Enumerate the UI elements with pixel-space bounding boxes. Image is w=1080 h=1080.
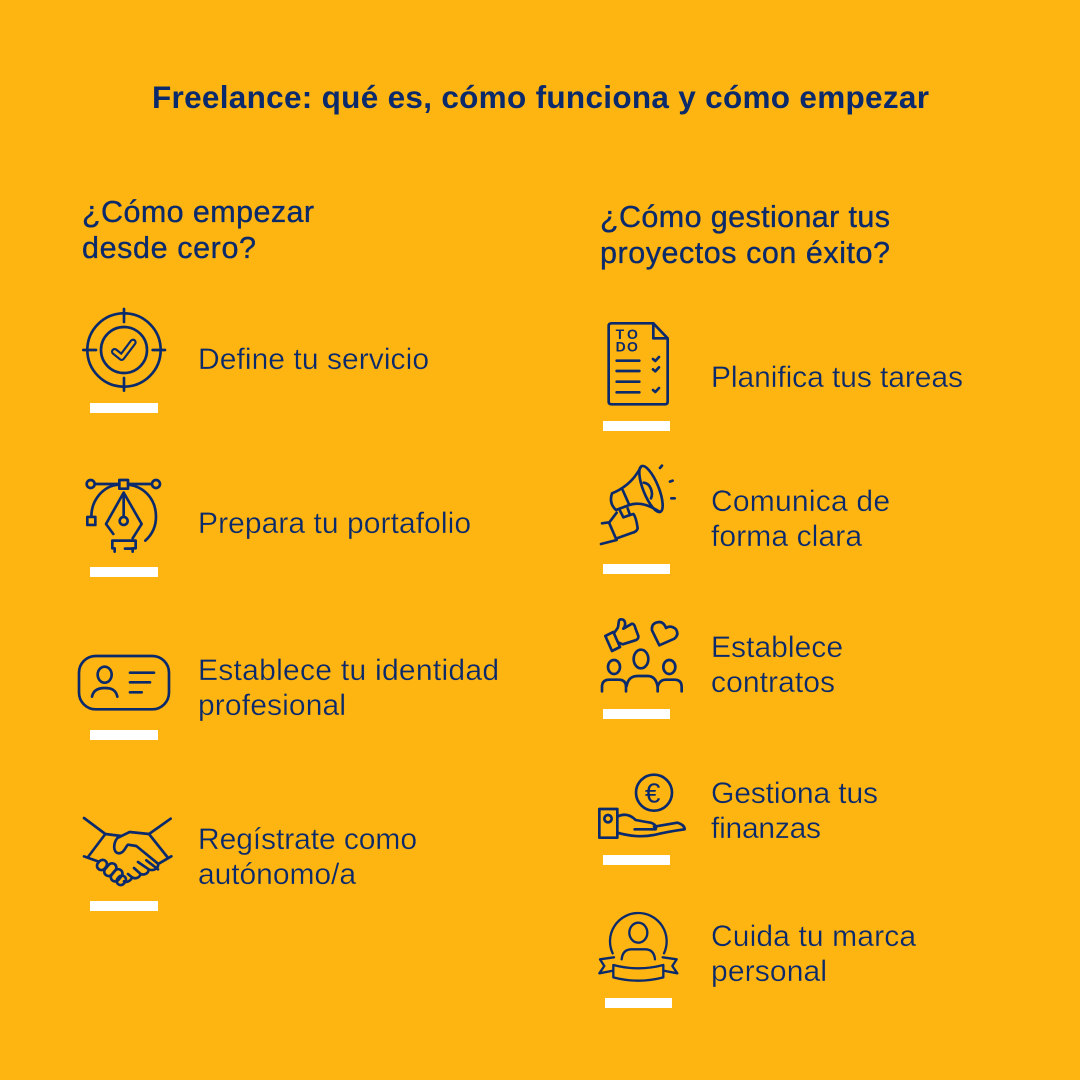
icon: target with check [83, 309, 165, 391]
bar [603, 564, 670, 574]
heading: right column [600, 200, 890, 270]
icon: id card [79, 656, 169, 709]
icon: megaphone [601, 463, 675, 544]
title: Freelance: qué es, cómo funciona y cómo empezar [152, 79, 929, 115]
panel: prepara tu portafolio [87, 480, 471, 577]
label: contratos [711, 666, 835, 699]
bar [603, 709, 670, 719]
label: personal [711, 955, 827, 988]
icon: people with like and heart [602, 619, 682, 691]
label [198, 823, 417, 891]
panel: define tu servicio [83, 309, 429, 413]
bar [90, 901, 158, 911]
label [711, 920, 916, 988]
panel: establece tu identidad profesional [79, 654, 499, 740]
heading: left column [82, 195, 314, 265]
label: forma clara [711, 520, 862, 553]
icon: hand with euro coin [599, 775, 685, 838]
label: Define tu servicio [198, 343, 429, 376]
icon: to-do list: TO [616, 326, 638, 342]
label [711, 631, 843, 699]
bar [603, 855, 670, 865]
bar [603, 421, 670, 431]
icon: hand with euro coin: € [645, 777, 661, 808]
bar [90, 730, 158, 740]
icon: person badge with ribbon [599, 913, 677, 981]
heading: right column: proyectos con éxito? [600, 236, 890, 270]
bar [605, 998, 672, 1008]
panel: establece contratos [602, 619, 843, 719]
label: Prepara tu portafolio [198, 507, 471, 540]
bar [90, 567, 158, 577]
label [711, 777, 878, 845]
label [711, 485, 890, 553]
label: Establece [711, 631, 843, 664]
label: Cuida tu marca [711, 920, 916, 953]
panel: cuida tu marca personal [599, 913, 916, 1008]
heading: left column: desde cero? [82, 231, 256, 265]
icon: to-do list [609, 323, 668, 404]
label: autónomo/a [198, 858, 356, 891]
label: finanzas [711, 812, 821, 845]
panel: gestiona tus finanzas [599, 775, 878, 865]
panel: comunica de forma clara [601, 463, 890, 574]
heading: right column: ¿Cómo gestionar tus [600, 200, 890, 234]
panel: planifica tus tareas [603, 323, 963, 431]
panel: registrate como autonomo [84, 818, 417, 911]
icon: to-do list: DO [616, 338, 638, 354]
label: Planifica tus tareas [711, 361, 963, 394]
heading: left column: ¿Cómo empezar [82, 195, 314, 229]
label: Gestiona tus [711, 777, 878, 810]
icon: handshake [84, 818, 171, 887]
label: Establece tu identidad [198, 654, 499, 687]
label: Comunica de [711, 485, 890, 518]
label: profesional [198, 689, 346, 722]
bar [90, 403, 158, 413]
label [198, 654, 499, 722]
label: Regístrate como [198, 823, 417, 856]
icon: pen tool [87, 480, 160, 552]
